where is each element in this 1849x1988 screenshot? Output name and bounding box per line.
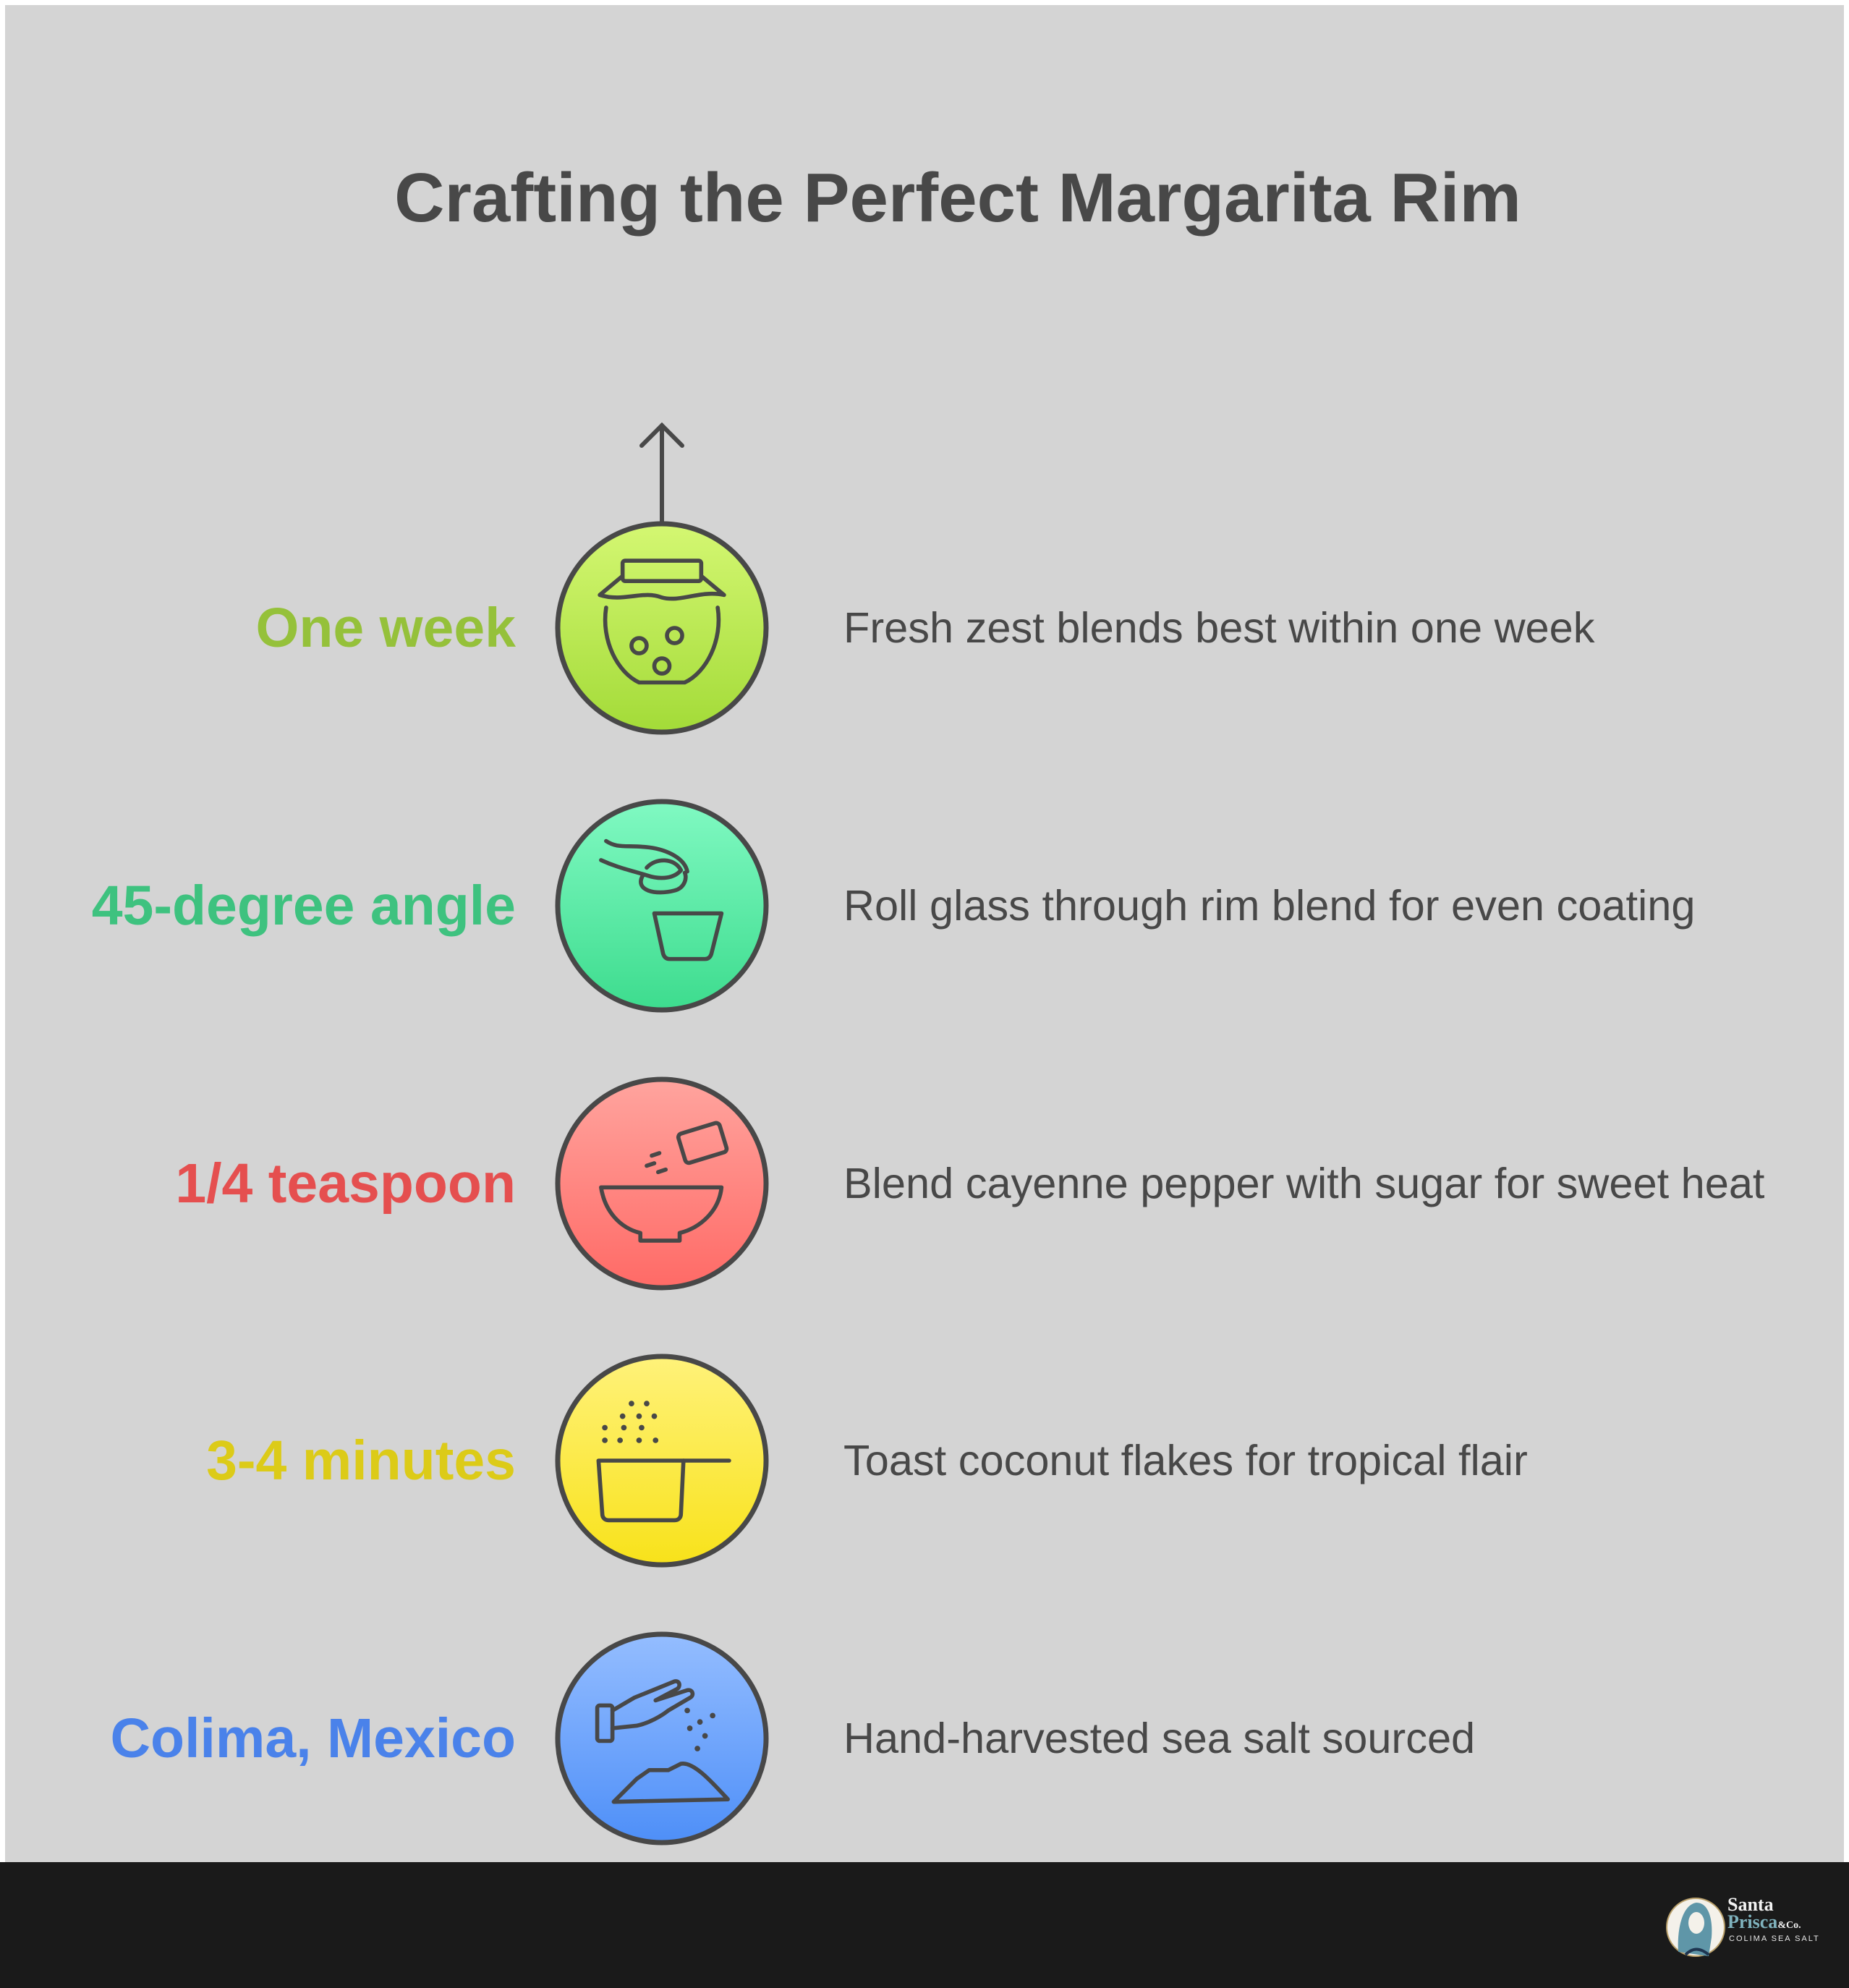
- arrow: [642, 425, 682, 522]
- logo: [1666, 1894, 1820, 1957]
- icon: jar: [558, 524, 766, 732]
- label: Colima, Mexico: Colima, Mexico: [110, 1707, 516, 1770]
- description: cayenne: Blend cayenne pepper with sugar for sweet heat: [843, 1159, 1764, 1207]
- label: 3-4 minutes: 3-4 minutes: [206, 1430, 516, 1492]
- description: zest: Fresh zest blends best within one week: [843, 603, 1594, 652]
- description: roll glass: Roll glass through rim blend for even coating: [843, 881, 1695, 930]
- footer: [0, 1862, 1849, 1988]
- title: Crafting the Perfect Margarita Rim: [394, 159, 1521, 237]
- icon: hand with salt: [558, 1634, 766, 1843]
- description: coconut: Toast coconut flakes for tropical flair: [843, 1436, 1528, 1484]
- label: one week: One week: [255, 597, 516, 659]
- icon: measuring cup: [558, 1356, 766, 1565]
- icon: bowl with shaker: [558, 1079, 766, 1288]
- icon: hand and glass: [558, 802, 766, 1010]
- logo: COLIMA SEA SALT: [1729, 1934, 1820, 1943]
- label: 1/4 teaspoon: 1/4 teaspoon: [175, 1152, 516, 1215]
- description: sea salt: Hand-harvested sea salt sourced: [843, 1714, 1475, 1762]
- label: 45-degree angle: 45-degree angle: [92, 875, 516, 937]
- logo: Santa: [1727, 1894, 1774, 1915]
- logo: Prisca&Co.: [1727, 1911, 1801, 1932]
